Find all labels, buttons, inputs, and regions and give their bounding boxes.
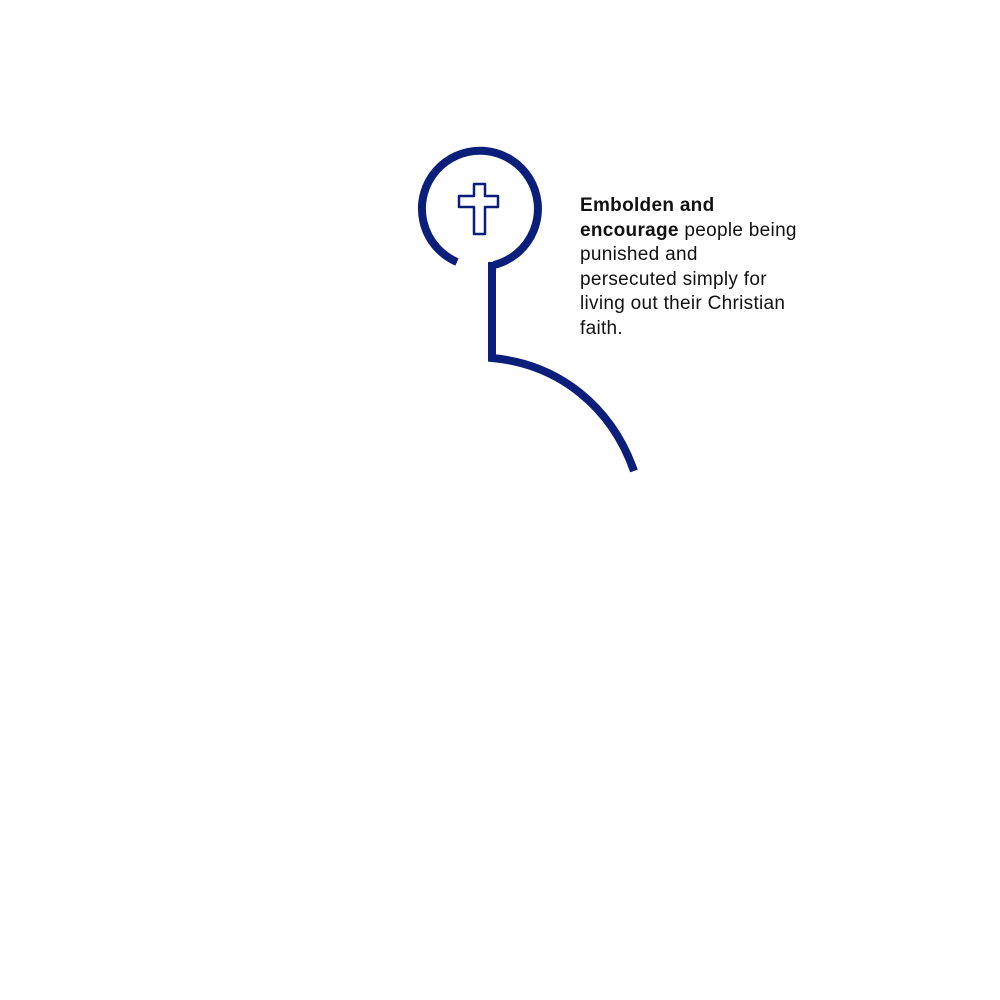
text block: encourage people being — [580, 220, 797, 240]
text block: punished and — [580, 244, 698, 265]
icon: cross — [459, 184, 498, 234]
text block: faith. — [580, 318, 623, 338]
text block: Embolden and — [580, 195, 714, 216]
text block — [580, 195, 797, 338]
text block: living out their Christian — [580, 293, 785, 314]
text block: persecuted simply for — [580, 268, 767, 290]
ring with bottom gap — [422, 151, 538, 265]
connector line and arc — [492, 262, 634, 471]
